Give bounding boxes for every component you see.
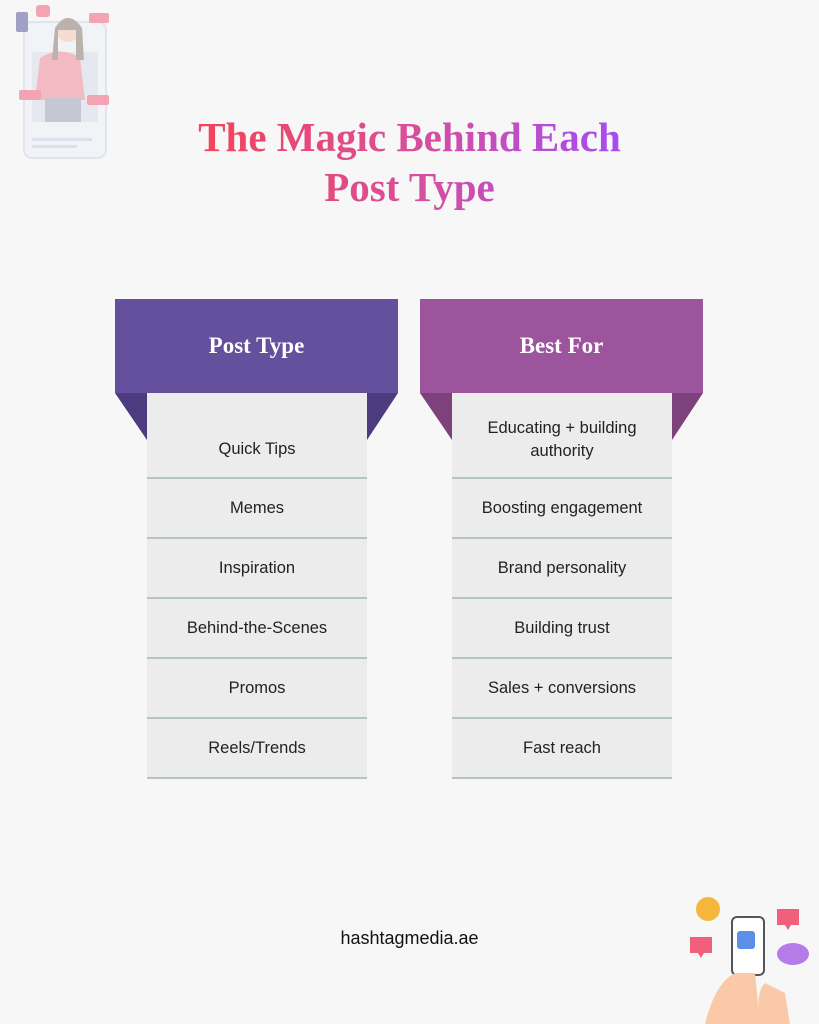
fold triangles — [115, 393, 398, 440]
column: post type — [115, 299, 398, 779]
title: Post Type — [324, 164, 495, 210]
list: best for: Educating + building — [487, 419, 637, 437]
list: post types: Promos — [229, 678, 285, 696]
list: post types — [147, 393, 367, 779]
fold triangles — [420, 393, 703, 440]
list: best for: Brand personality — [498, 558, 626, 576]
header: Best For — [420, 299, 703, 393]
list: best for: authority — [530, 442, 594, 460]
column: best for — [420, 299, 703, 779]
list: post types: Memes — [230, 498, 284, 516]
footer url: hashtagmedia.ae — [340, 928, 479, 948]
list: best for: Boosting engagement — [482, 498, 642, 516]
header: Post Type — [115, 299, 398, 393]
list: best for: Sales + conversions — [488, 678, 636, 696]
list: post types: Inspiration — [219, 558, 295, 576]
title — [0, 112, 819, 212]
title: The Magic Behind Each — [198, 114, 621, 160]
list: post types: Reels/Trends — [208, 738, 306, 756]
list: best for: Building trust — [514, 618, 610, 636]
illustration: selfie girl — [16, 5, 109, 159]
list: best for: Fast reach — [523, 738, 601, 756]
list: best for — [452, 393, 672, 779]
illustration: phone with social icons — [690, 897, 809, 1024]
list: post types: Behind-the-Scenes — [187, 618, 327, 636]
list: post types: Quick Tips — [218, 440, 296, 458]
header: Best For: Best For — [520, 333, 603, 358]
header: Post Type: Post Type — [209, 333, 304, 358]
